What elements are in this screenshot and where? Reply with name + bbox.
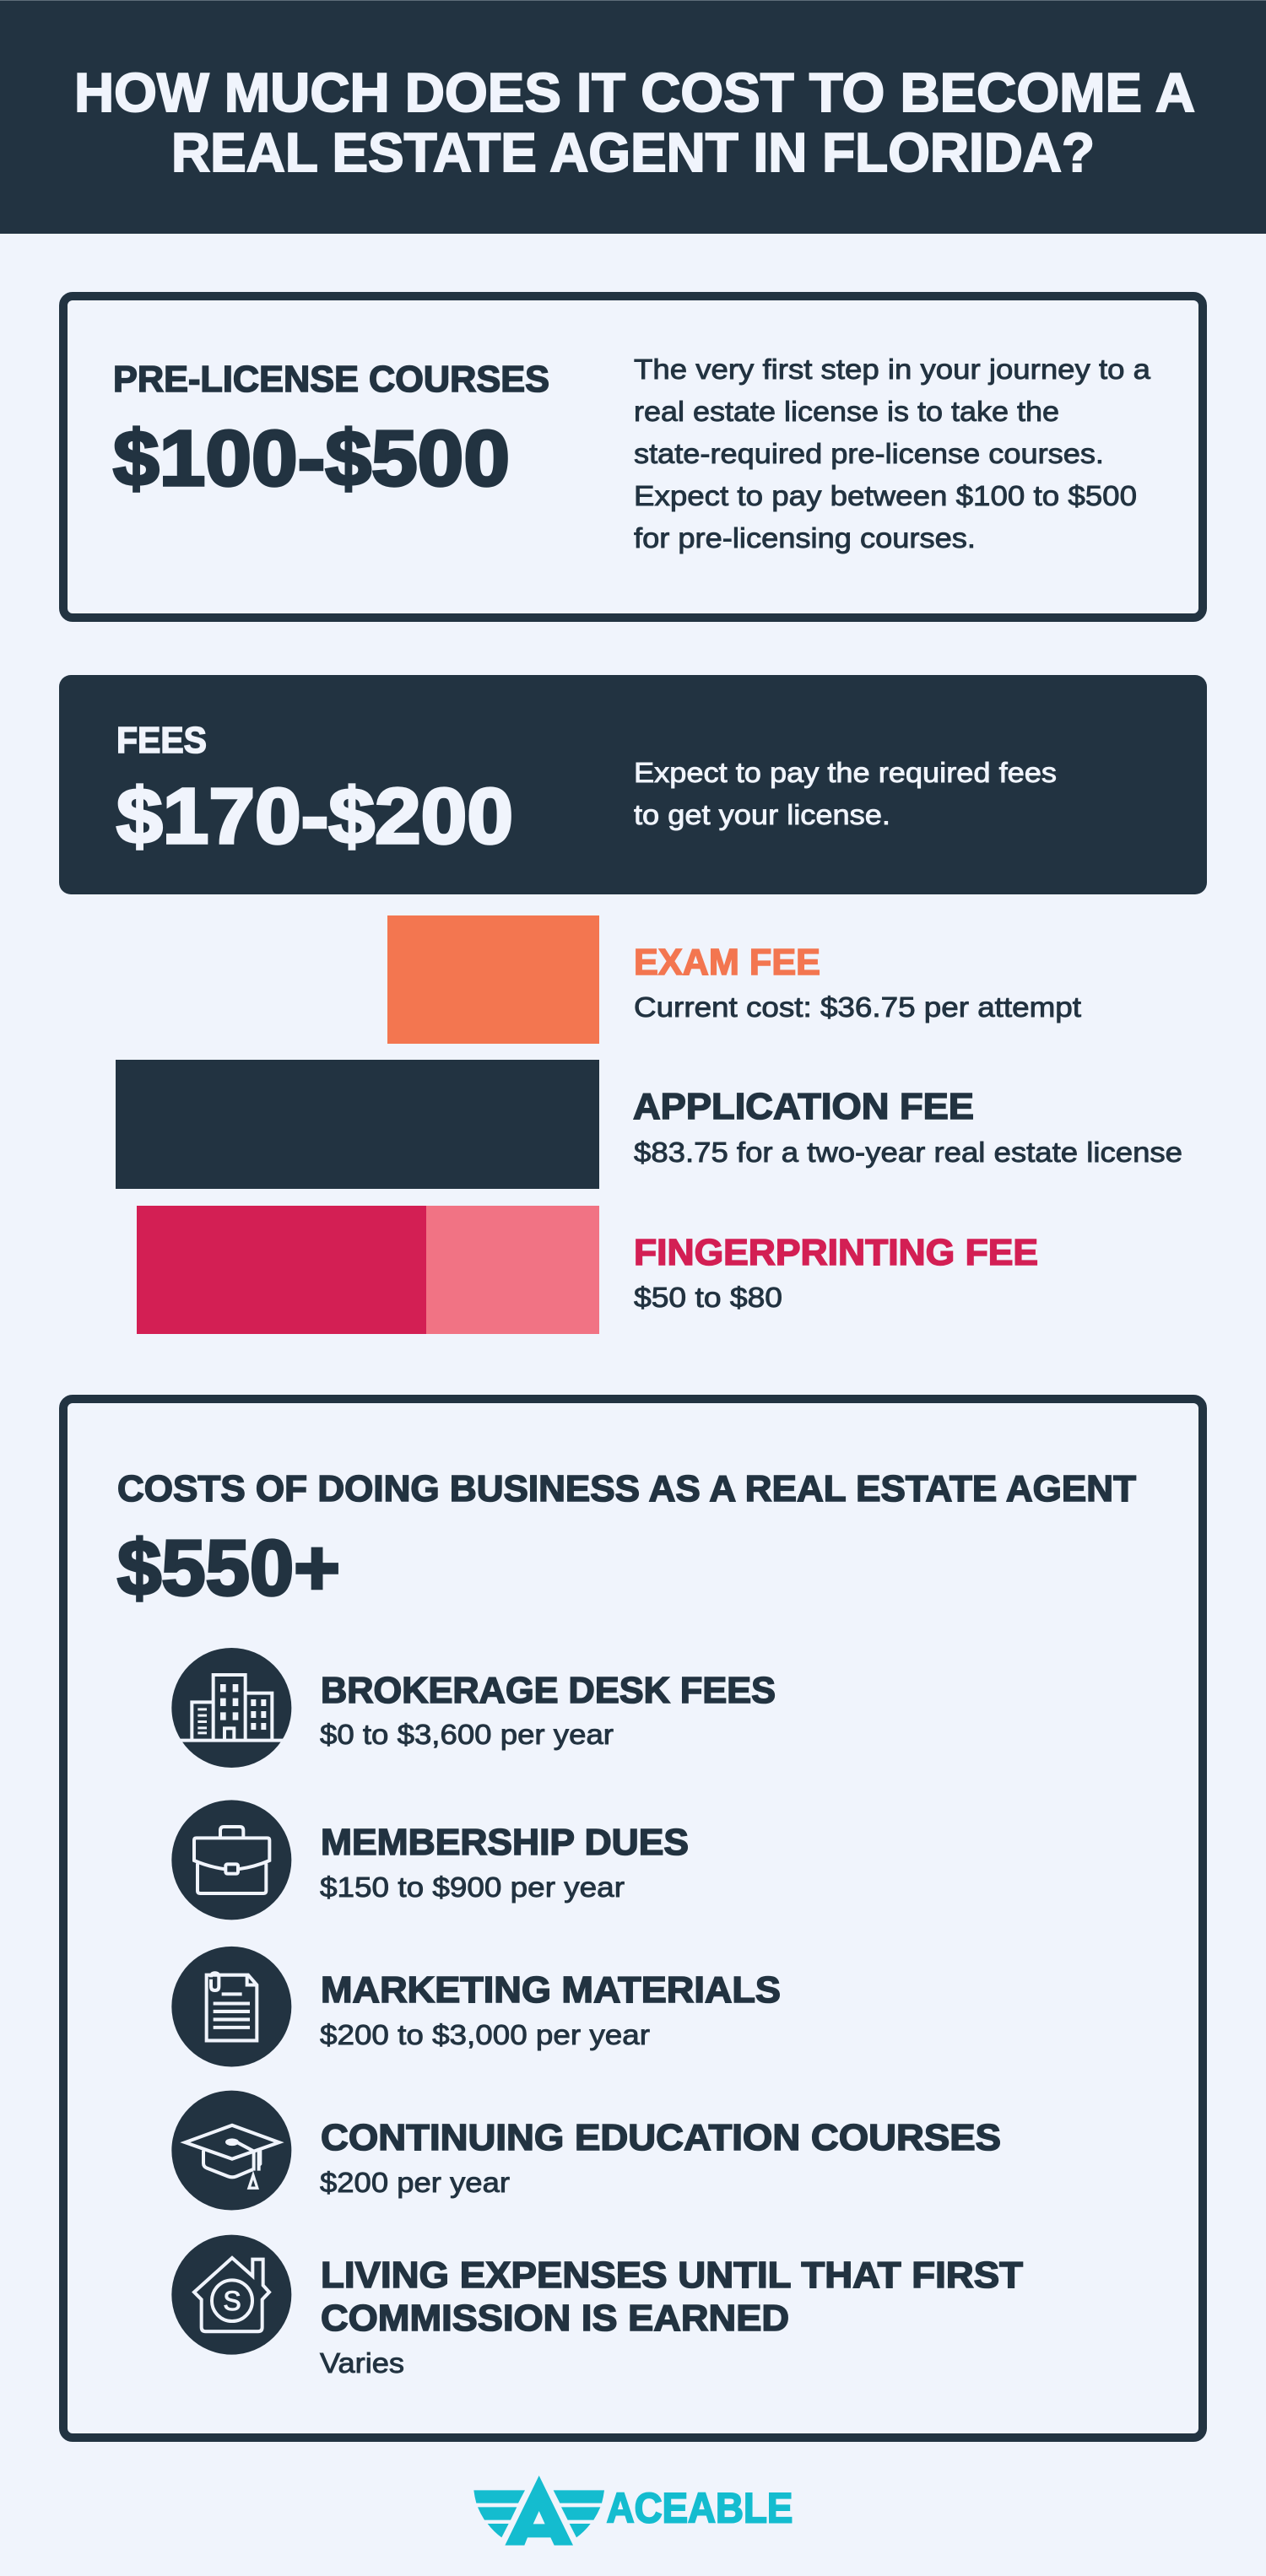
bar: fingerprinting fee range [137, 1206, 599, 1334]
price: costs: $550+ [117, 1524, 340, 1612]
bar: exam fee [387, 915, 599, 1044]
icon: office buildings [171, 1648, 291, 1768]
icon: document [171, 1947, 291, 2067]
item: membership dues: $150 to $900 per year [320, 1872, 625, 1904]
item: marketing materials [320, 1969, 781, 2051]
text: pre-license description: state-required pre-license courses. [634, 439, 1104, 470]
label: application fee: APPLICATION FEE [633, 1086, 974, 1127]
item: living expenses: LIVING EXPENSES UNTIL THAT FIRST [321, 2255, 1023, 2296]
item: continuing education courses [320, 2117, 1001, 2199]
text: pre-license description: Expect to pay between $100 to $500 [634, 481, 1137, 512]
header banner [0, 0, 1266, 234]
heading: fees: FEES [116, 720, 207, 761]
label: application fee [633, 1086, 1182, 1169]
icon: house with dollar: S [223, 2286, 241, 2316]
item: living expenses: COMMISSION IS EARNED [321, 2298, 789, 2339]
label: exam fee: EXAM FEE [634, 942, 820, 983]
text: pre-license description [634, 354, 1150, 554]
text: pre-license description: The very first step in your journey to a [634, 354, 1150, 386]
item: brokerage desk fees: BROKERAGE DESK FEES [321, 1670, 776, 1711]
item: living expenses [320, 2255, 1023, 2379]
item: marketing materials: $200 to $3,000 per year [320, 2020, 650, 2051]
text: pre-license description: for pre-licensing courses. [634, 523, 976, 554]
icon: graduation cap [171, 2091, 291, 2211]
item: marketing materials: MARKETING MATERIALS [321, 1969, 781, 2011]
icon: house with dollar [171, 2235, 291, 2355]
item: brokerage desk fees: $0 to $3,600 per year [320, 1720, 614, 1751]
label: application fee: $83.75 for a two-year real estate license [634, 1137, 1182, 1169]
label: exam fee: Current cost: $36.75 per attempt [634, 992, 1082, 1023]
title: REAL ESTATE AGENT IN FLORIDA? [171, 122, 1095, 183]
item: membership dues: MEMBERSHIP DUES [321, 1822, 689, 1863]
label: fingerprinting fee [634, 1232, 1038, 1314]
panel: pre-license courses [63, 296, 1203, 618]
item: membership dues [320, 1822, 689, 1904]
text: fees description [634, 758, 1057, 831]
item: brokerage desk fees [320, 1670, 776, 1751]
item: continuing education courses: $200 per year [320, 2168, 510, 2199]
title [74, 62, 1195, 183]
label: fingerprinting fee: $50 to $80 [634, 1283, 782, 1314]
label: fingerprinting fee: FINGERPRINTING FEE [634, 1232, 1038, 1273]
text: pre-license description: real estate license is to take the [634, 397, 1059, 428]
heading: pre-license courses: PRE-LICENSE COURSES [113, 359, 549, 400]
price: pre-license: $100-$500 [113, 414, 510, 502]
panel: costs of doing business [63, 1399, 1203, 2438]
logo: Aceable: ACEABLE [607, 2484, 793, 2531]
heading: costs of doing business: COSTS OF DOING BUSINESS AS A REAL ESTATE AGENT [117, 1468, 1136, 1509]
price: fees: $170-$200 [116, 772, 513, 860]
icon: briefcase [171, 1800, 291, 1920]
text: fees description: to get your license. [634, 800, 890, 831]
panel: fees [59, 675, 1207, 894]
label: exam fee [634, 942, 1082, 1023]
bar: application fee [116, 1060, 599, 1189]
text: fees description: Expect to pay the required fees [634, 758, 1057, 789]
item: continuing education courses: CONTINUING EDUCATION COURSES [321, 2117, 1001, 2158]
title: HOW MUCH DOES IT COST TO BECOME A [74, 62, 1195, 123]
item: living expenses: Varies [320, 2348, 404, 2379]
logo: Aceable [473, 2476, 793, 2546]
